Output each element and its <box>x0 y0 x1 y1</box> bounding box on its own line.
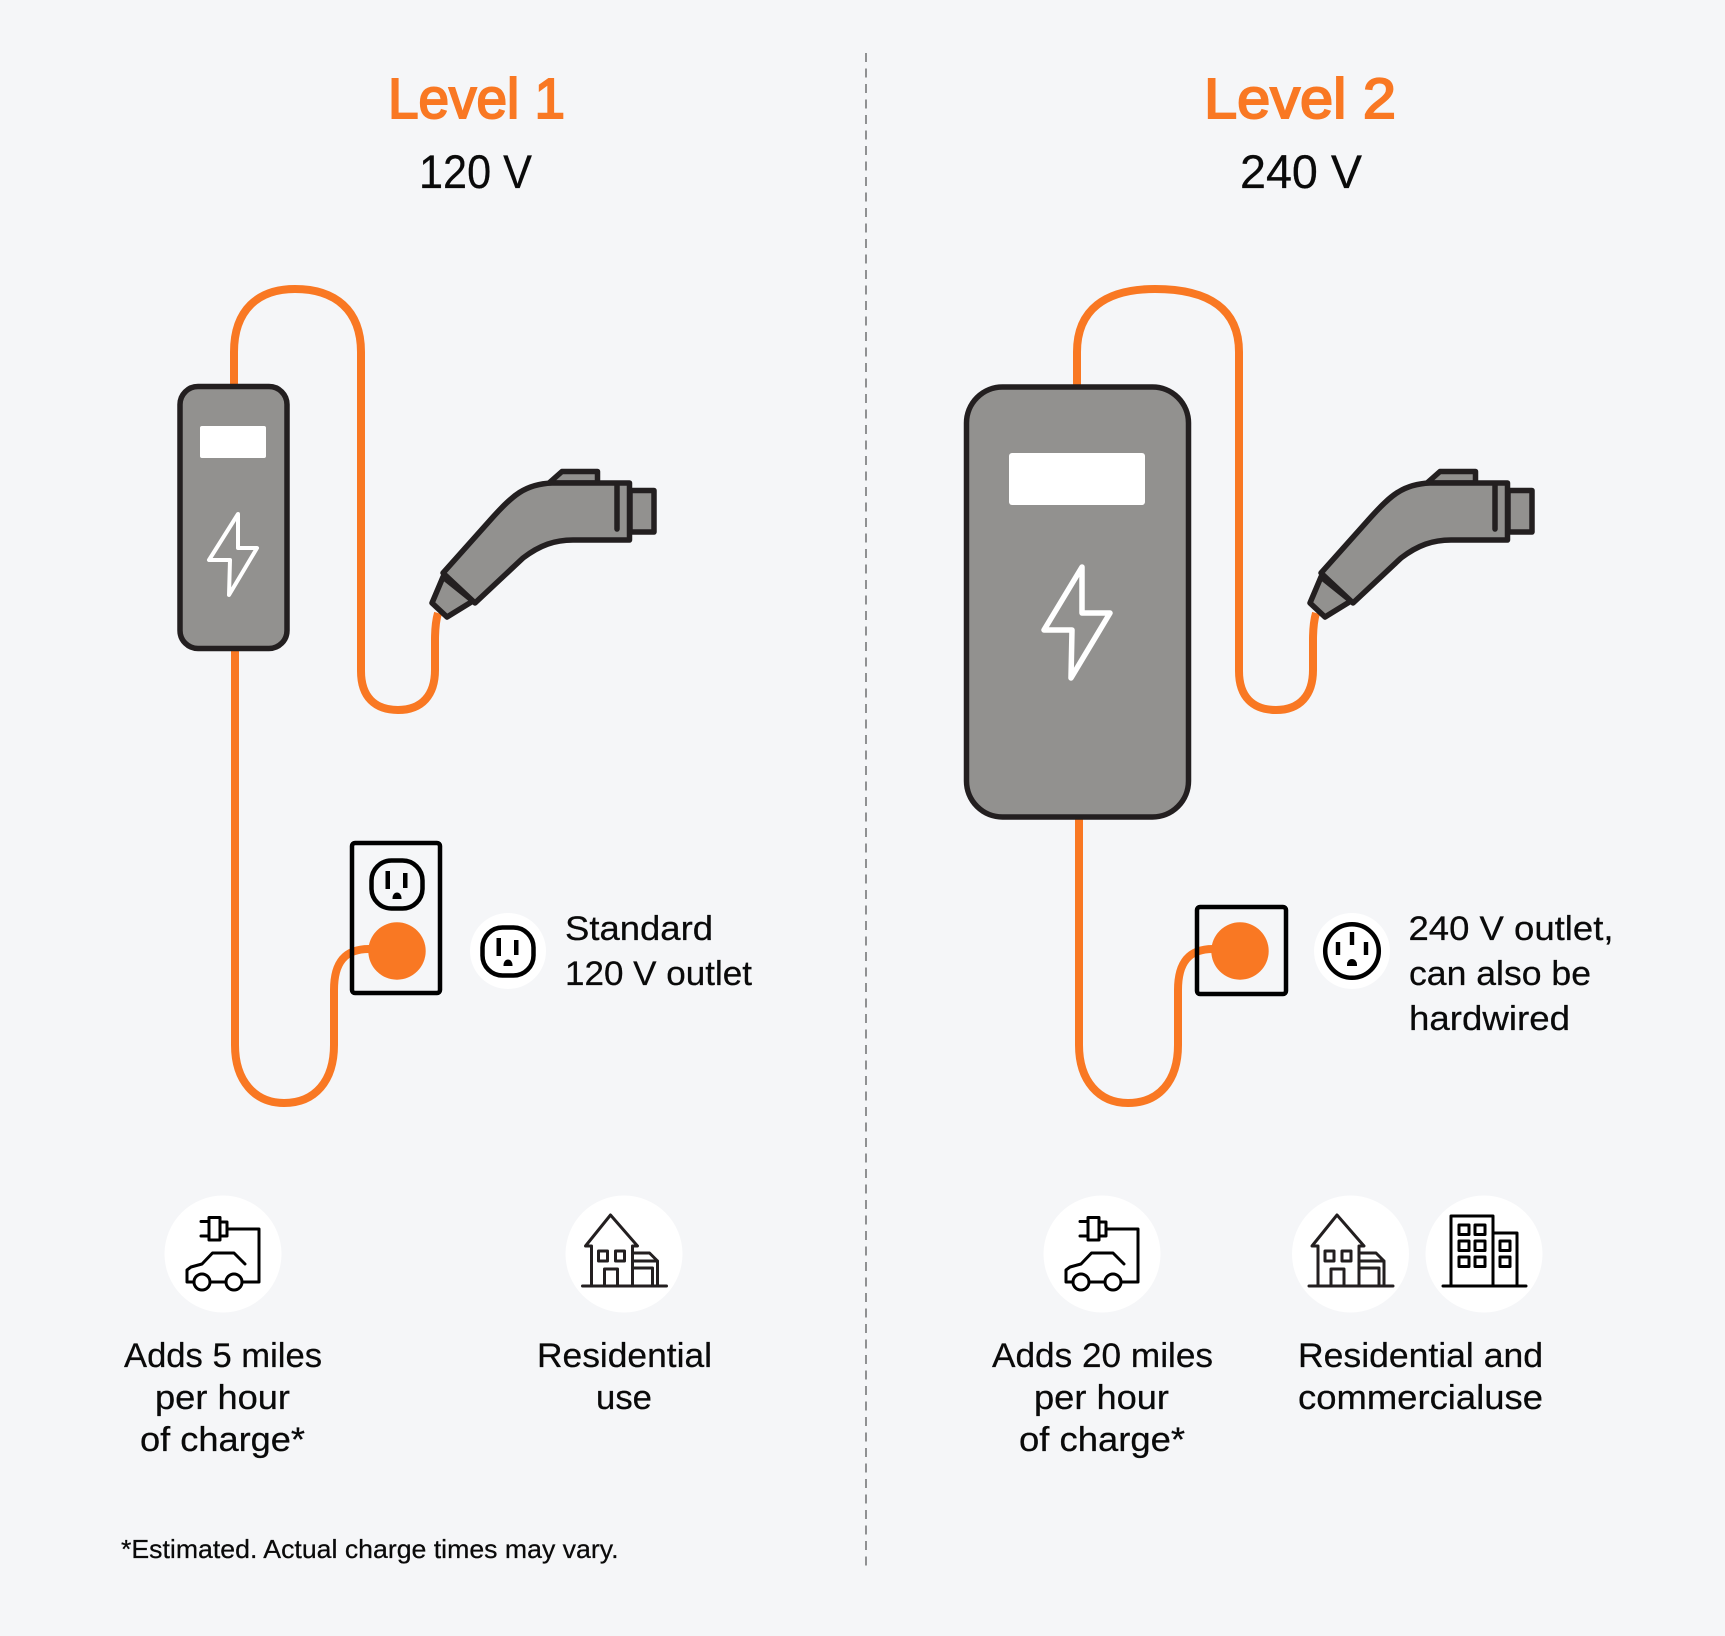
label: standard outlet <box>565 910 753 993</box>
footnote: *Estimated. Actual charge times may vary. <box>121 1534 618 1564</box>
label: residential and commercial use: Residential and <box>1298 1337 1543 1375</box>
label: 240 V outlet <box>1408 910 1614 1038</box>
label: adds 5 miles: per hour <box>155 1379 290 1417</box>
label: adds 20 miles: per hour <box>1034 1379 1169 1417</box>
label: 240 V outlet: can also be <box>1409 955 1591 993</box>
duplex outlet <box>352 843 440 993</box>
cable: charger to outlet <box>235 648 369 1103</box>
cable: charger to outlet <box>1079 816 1213 1103</box>
icon: 120 V socket <box>470 913 546 989</box>
label: adds 5 miles: Adds 5 miles <box>124 1337 322 1375</box>
connector handle <box>1310 472 1532 617</box>
panel: Level 2 <box>966 67 1614 1459</box>
label: residential use: use <box>596 1379 652 1417</box>
icon: commercial building <box>1426 1196 1542 1312</box>
icon: house <box>1292 1196 1409 1312</box>
label: adds 5 miles <box>124 1337 322 1459</box>
subtitle: 240 V: 240 V <box>1240 145 1363 198</box>
charger unit <box>180 386 287 648</box>
label: adds 20 miles: of charge* <box>1019 1421 1185 1459</box>
icon: car charging <box>1044 1196 1160 1312</box>
label: adds 20 miles <box>992 1337 1213 1459</box>
label: standard outlet: Standard <box>565 910 713 948</box>
label: 240 V outlet: 240 V outlet, <box>1408 910 1614 948</box>
label: residential use <box>537 1337 712 1417</box>
title: Level 2: Level 2 <box>1204 67 1396 131</box>
label: residential and commercial use <box>1298 1337 1543 1417</box>
charger unit <box>966 387 1188 817</box>
icon: house <box>566 1196 682 1312</box>
cable: charger to connector <box>1077 289 1316 710</box>
cable: charger to connector <box>234 289 438 710</box>
icon: 240 V socket <box>1314 913 1390 989</box>
title: Level 1: Level 1 <box>388 67 565 131</box>
label: residential use: Residential <box>537 1337 712 1375</box>
icon: car charging <box>164 1196 282 1312</box>
subtitle: 120 V: 120 V <box>419 145 533 198</box>
label: adds 5 miles: of charge* <box>140 1421 305 1459</box>
label: standard outlet: 120 V outlet <box>565 955 753 993</box>
label: residential and commercial use: commercialuse <box>1298 1379 1543 1417</box>
label: 240 V outlet: hardwired <box>1409 1000 1570 1038</box>
panel: Level 1 <box>121 67 753 1564</box>
label: adds 20 miles: Adds 20 miles <box>992 1337 1213 1375</box>
240 V wall outlet <box>1197 907 1286 994</box>
connector handle <box>432 472 654 617</box>
